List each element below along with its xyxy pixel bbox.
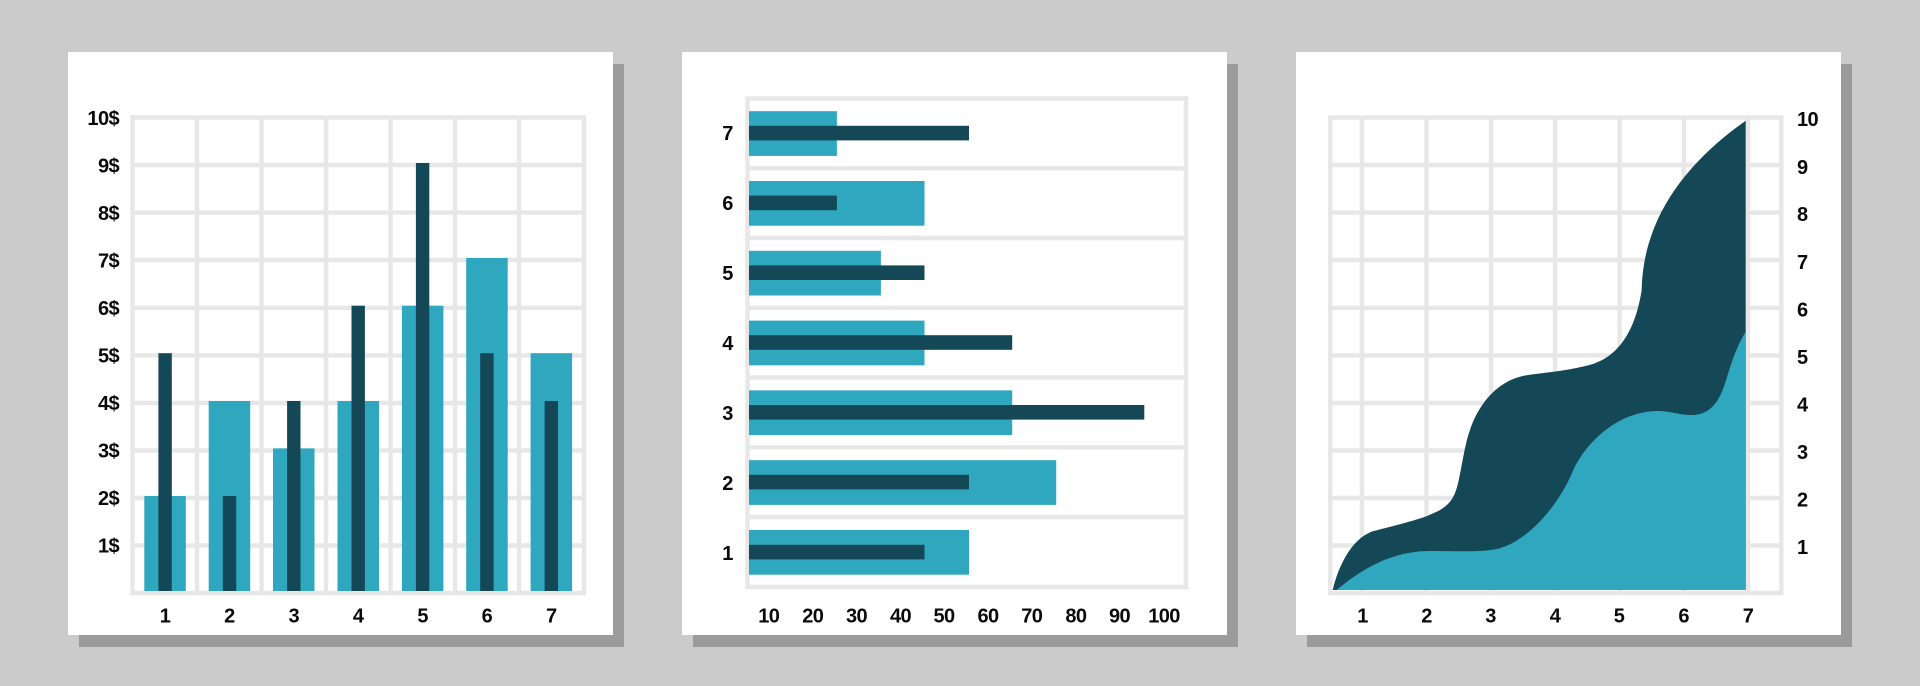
y-axis labels: 7 [722,123,733,145]
x-axis labels: 4 [1550,606,1562,628]
y-axis labels: 10 [1797,109,1819,131]
x-axis labels [160,606,557,628]
x-axis labels: 1 [160,606,171,628]
x-axis labels: 3 [1485,606,1496,628]
x-axis labels [758,606,1180,628]
x-axis labels: 70 [1021,606,1043,628]
y-axis labels: 9$ [98,156,119,178]
panel: vertical bar chart [68,52,624,647]
y-axis labels: 6 [1797,300,1808,322]
y-axis labels [87,108,119,558]
y-axis labels [1797,109,1819,559]
y-axis labels: 8 [1797,204,1808,226]
x-axis labels: 50 [933,606,955,628]
panel: horizontal bar chart [682,52,1238,647]
dark area: series B [1333,121,1746,590]
x-axis labels: 5 [417,606,428,628]
y-axis labels: 4$ [98,393,119,415]
y-axis labels: 4 [1797,394,1809,416]
light area: series A [1337,332,1746,590]
x-axis labels: 6 [482,606,493,628]
x-axis labels: 90 [1109,606,1130,628]
y-axis labels: 6 [722,193,733,215]
y-axis labels: 2 [1797,490,1808,512]
y-axis labels: 6$ [98,298,119,320]
y-axis labels: 1$ [98,536,119,558]
x-axis labels: 2 [224,606,235,628]
x-axis labels: 100 [1148,606,1180,628]
y-axis labels: 3 [1797,442,1808,464]
x-axis labels: 60 [977,606,999,628]
y-axis labels: 10$ [87,108,119,130]
x-axis labels: 2 [1421,606,1432,628]
y-axis labels [722,123,734,565]
x-axis labels: 3 [289,606,300,628]
x-axis labels: 80 [1065,606,1087,628]
y-axis labels: 7$ [98,250,119,272]
x-axis labels: 10 [758,606,780,628]
light bars: series A [749,111,1056,575]
x-axis labels: 30 [846,606,867,628]
x-axis labels: 6 [1678,606,1689,628]
y-axis labels: 2 [722,473,733,495]
y-axis labels: 5 [1797,347,1808,369]
x-axis labels: 20 [802,606,824,628]
y-axis labels: 5 [722,263,733,285]
y-axis labels: 2$ [98,488,119,510]
y-axis labels: 5$ [98,346,119,368]
x-axis labels: 7 [546,606,557,628]
light bars: series A [144,258,572,591]
y-axis labels: 9 [1797,157,1808,179]
y-axis labels: 4 [722,333,734,355]
y-axis labels: 7 [1797,252,1808,274]
x-axis labels: 40 [890,606,911,628]
y-axis labels: 8$ [98,203,119,225]
y-axis labels: 1 [722,543,733,565]
y-axis labels: 3$ [98,440,119,462]
dark bars: series B [749,126,1144,559]
x-axis labels: 4 [353,606,365,628]
panel: area chart [1296,52,1852,647]
y-axis labels: 3 [722,403,733,425]
x-axis labels [1357,606,1754,628]
y-axis labels: 1 [1797,537,1808,559]
x-axis labels: 1 [1357,606,1368,628]
x-axis labels: 5 [1614,606,1625,628]
dark bars: series B [158,163,558,591]
x-axis labels: 7 [1743,606,1754,628]
